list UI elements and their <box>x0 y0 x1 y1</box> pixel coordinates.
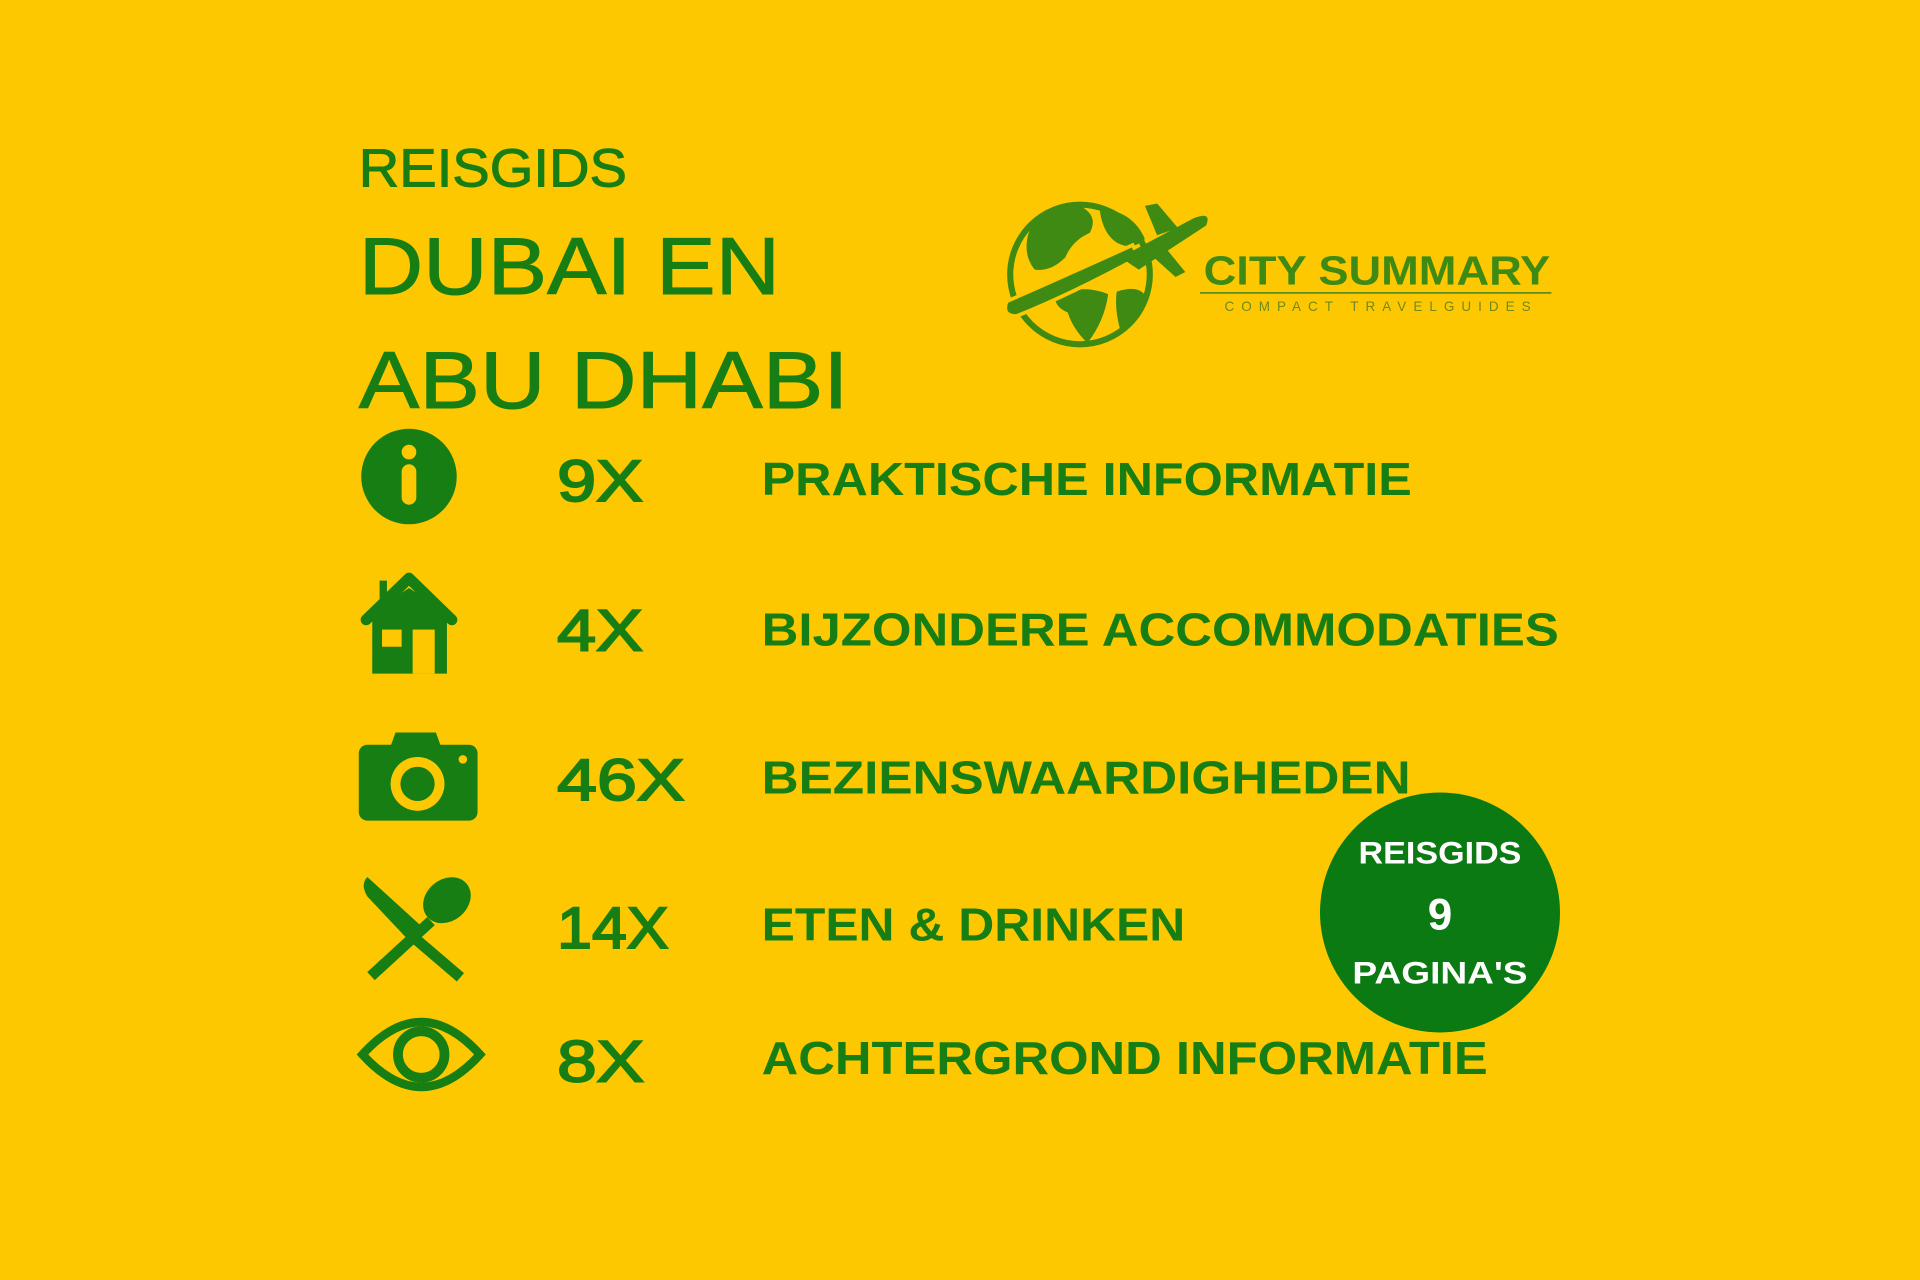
label: BIJZONDERE ACCOMMODATIES <box>762 604 1559 656</box>
count 9X: 9X <box>557 449 643 514</box>
badge: reisgids 9 pagina's <box>1320 792 1560 1032</box>
count 4X: 4X <box>557 598 643 663</box>
subtitle: REISGIDS: REISGIDS <box>359 138 627 198</box>
icon: info <box>361 429 457 524</box>
icon: eye <box>362 1022 480 1087</box>
row: eten & drinken <box>364 868 1185 977</box>
title line 1: DUBAI EN <box>359 222 780 312</box>
row: accommodaties <box>366 578 1559 674</box>
label: BEZIENSWAARDIGHEDEN <box>762 752 1411 804</box>
count 14X: 14X <box>557 896 669 961</box>
label: ETEN & DRINKEN <box>762 899 1185 951</box>
badge: reisgids 9 pagina's: PAGINA'S <box>1352 954 1528 990</box>
icon: camera <box>359 732 478 821</box>
row: bezienswaardigheden <box>359 732 1411 821</box>
count 46X: 46X <box>557 748 684 813</box>
count 8X: 8X <box>557 1029 644 1094</box>
logo wordmark: CITY SUMMARY <box>1204 247 1550 293</box>
title block <box>359 138 849 426</box>
logo: City Summary <box>1005 203 1551 344</box>
label: ACHTERGROND INFORMATIE <box>762 1032 1488 1084</box>
row: praktische informatie <box>361 429 1412 524</box>
badge: reisgids 9 pagina's: REISGIDS <box>1359 834 1521 870</box>
logo globe icon <box>1005 203 1208 344</box>
logo tagline: COMPACT TRAVELGUIDES <box>1224 299 1531 314</box>
row: achtergrond informatie <box>362 1022 1488 1094</box>
badge: reisgids 9 pagina's: 9 <box>1428 891 1452 940</box>
label: PRAKTISCHE INFORMATIE <box>762 453 1412 505</box>
icon: house <box>366 578 452 674</box>
title line 2: ABU DHABI <box>359 336 849 426</box>
icon: cutlery <box>364 868 480 977</box>
